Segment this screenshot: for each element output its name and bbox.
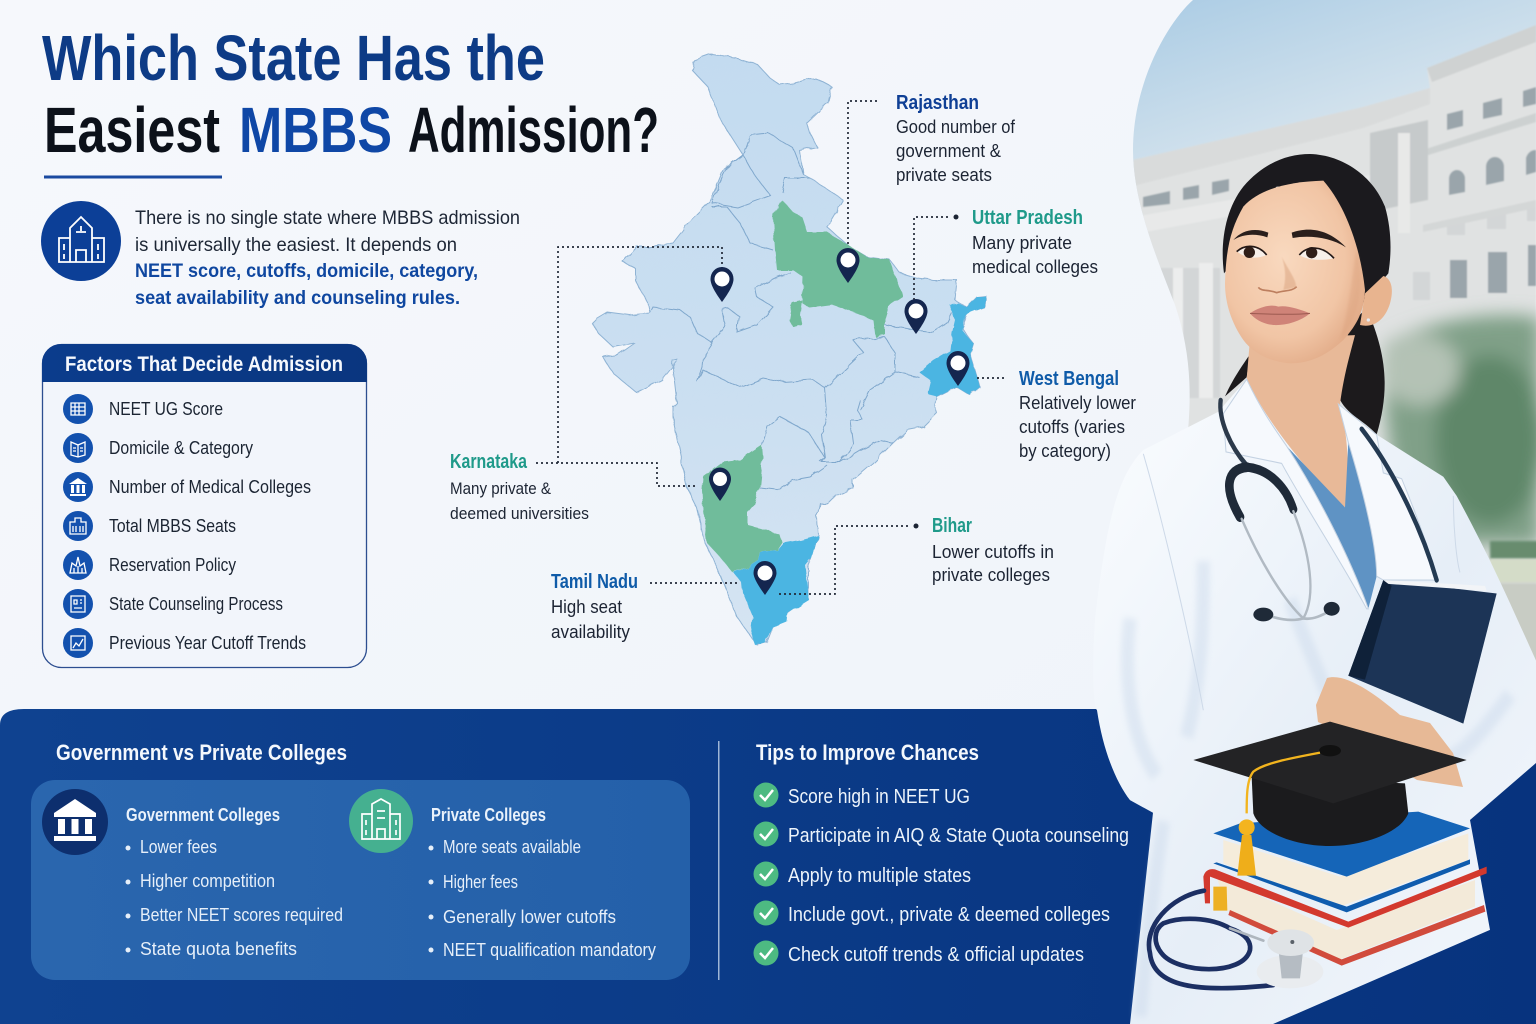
- list: government colleges: Higher competition: [140, 870, 275, 891]
- label: Rajasthan: government &: [896, 140, 1002, 161]
- label: Karnataka: Karnataka: [450, 451, 528, 473]
- factor: Reservation Policy: [63, 550, 236, 580]
- label: West Bengal: Relatively lower: [1019, 392, 1136, 413]
- label: Rajasthan: Rajasthan: [896, 92, 979, 114]
- label: Tamil Nadu: High seat: [551, 596, 622, 617]
- factor: State Counseling Process: [63, 589, 283, 619]
- label: Bihar: Lower cutoffs in: [932, 541, 1054, 562]
- panel: factors that decide admission: Factors That Decide Admission: [65, 353, 343, 376]
- map pins: [709, 248, 970, 595]
- ear: [1360, 276, 1392, 326]
- coat: [1093, 379, 1536, 1024]
- list: private colleges: Generally lower cutoffs: [443, 906, 616, 927]
- scrubs: [1287, 442, 1377, 609]
- pin: West Bengal: [946, 351, 970, 386]
- pin: Bihar: [904, 299, 928, 334]
- blue book: [1213, 812, 1470, 912]
- tip 3: Apply to multiple states: [788, 865, 971, 887]
- title: MBBS: [239, 94, 392, 166]
- label: Tamil Nadu: Tamil Nadu: [551, 571, 638, 593]
- nose: [1258, 287, 1297, 293]
- red book: [1203, 867, 1487, 966]
- panel: college comparison: [31, 780, 690, 980]
- list: private colleges: NEET qualification mandatory: [443, 939, 657, 960]
- factor: Total MBBS Seats: Total MBBS Seats: [109, 516, 236, 536]
- bottom panel background: [0, 709, 1536, 1024]
- stethoscope on books: [1149, 891, 1290, 988]
- label: West Bengal: by category): [1019, 440, 1111, 461]
- highlighted state: Tamil Nadu: [733, 535, 818, 645]
- pin: Karnataka: [709, 468, 731, 501]
- highlighted state: Karnataka: [702, 445, 782, 572]
- factor: Previous Year Cutoff Trends: [63, 628, 306, 658]
- cap: [1193, 722, 1467, 911]
- list: government colleges: Better NEET scores required: [140, 904, 343, 925]
- factor: Reservation Policy: Reservation Policy: [109, 555, 236, 575]
- title: Admission?: [408, 94, 659, 166]
- title: Which State Has the: [42, 22, 545, 94]
- stethoscope: [1220, 400, 1437, 620]
- factor: Total MBBS Seats: [63, 511, 236, 541]
- icon: college building: [41, 201, 121, 281]
- title: [42, 22, 659, 166]
- background photo: college building and trees: [1133, 0, 1536, 660]
- label: Tamil Nadu: [551, 571, 638, 642]
- tip 1: [754, 782, 970, 808]
- hand holding the notebook: [1316, 677, 1463, 787]
- panel: factors that decide admission: [42, 344, 367, 668]
- factor: State Counseling Process: State Counseling Process: [109, 594, 283, 614]
- tip 5: Check cutoff trends & official updates: [788, 944, 1084, 966]
- head: [1223, 154, 1392, 363]
- tip 3: [754, 862, 971, 887]
- title: Easiest: [44, 94, 220, 166]
- list: private colleges: Private Colleges: [431, 804, 546, 825]
- label: Uttar Pradesh: [972, 207, 1098, 277]
- pin: central west: [710, 267, 734, 302]
- label: Uttar Pradesh: medical colleges: [972, 256, 1098, 277]
- factor: NEET UG Score: NEET UG Score: [109, 399, 223, 419]
- eyebrows: [1233, 230, 1346, 247]
- heading: government vs private colleges: Government vs Private Colleges: [56, 740, 347, 765]
- right coat lapel: [1338, 404, 1438, 580]
- doctor illustration: [1093, 154, 1536, 1024]
- icon: private college: [349, 789, 413, 853]
- list: government colleges: Government Colleges: [126, 804, 280, 825]
- tip 4: Include govt., private & deemed colleges: [788, 904, 1110, 926]
- list: private colleges: [428, 804, 657, 960]
- factor: Number of Medical Colleges: [63, 472, 311, 502]
- intro text: NEET score, cutoffs, domicile, category,: [135, 260, 478, 282]
- intro text: is universally the easiest. It depends on: [135, 234, 457, 256]
- label: Rajasthan: private seats: [896, 164, 992, 185]
- label: West Bengal: cutoffs (varies: [1019, 416, 1125, 437]
- highlighted state: Uttar Pradesh: [773, 200, 903, 337]
- list: private colleges: More seats available: [443, 836, 581, 857]
- label: West Bengal: [1019, 368, 1136, 461]
- tip 2: Participate in AIQ & State Quota counseling: [788, 825, 1129, 847]
- intro text: seat availability and counseling rules.: [135, 287, 460, 309]
- pin: Tamil Nadu: [754, 561, 776, 595]
- factor: NEET UG Score: [63, 394, 223, 424]
- map of India: [592, 54, 986, 645]
- label: Tamil Nadu: availability: [551, 621, 631, 642]
- panel: tips to improve chances: [754, 740, 1129, 966]
- factor: Previous Year Cutoff Trends: Previous Year Cutoff Trends: [109, 633, 306, 653]
- factor: Domicile and Category: Domicile & Category: [109, 438, 253, 458]
- list: government colleges: State quota benefits: [140, 938, 297, 959]
- label: West Bengal: West Bengal: [1019, 368, 1119, 390]
- highlighted state: West Bengal: [919, 296, 986, 397]
- intro text: There is no single state where MBBS admission: [135, 207, 520, 229]
- eyes: [1237, 247, 1334, 260]
- connector lines: [536, 101, 1007, 594]
- list: government colleges: Lower fees: [140, 836, 217, 857]
- label: Rajasthan: Good number of: [896, 116, 1016, 137]
- notebook: [1348, 580, 1497, 724]
- label: Karnataka: Many private &: [450, 479, 552, 498]
- label: Uttar Pradesh: Many private: [972, 232, 1072, 253]
- label: Uttar Pradesh: Uttar Pradesh: [972, 207, 1083, 229]
- hair: [1223, 154, 1391, 307]
- face shading: [1340, 250, 1361, 340]
- panel: tips to improve chances: Tips to Improve Chances: [756, 740, 979, 765]
- icon: government college: [42, 789, 108, 855]
- factor: Domicile and Category: [63, 433, 253, 463]
- label: Bihar: [932, 515, 1054, 585]
- tip 1: Score high in NEET UG: [788, 786, 970, 808]
- coat shading: [1128, 561, 1510, 1016]
- ponytail: [1225, 308, 1385, 435]
- list: government colleges: [126, 804, 343, 959]
- list: private colleges: Higher fees: [443, 871, 518, 892]
- left coat lapel: [1223, 379, 1368, 609]
- label: Bihar: private colleges: [932, 564, 1050, 585]
- pin: Uttar Pradesh: [836, 248, 860, 283]
- label: Rajasthan: [896, 92, 1016, 185]
- factor: Number of Medical Colleges: Number of Medical Colleges: [109, 477, 311, 497]
- face: [1225, 181, 1365, 363]
- label: Bihar: Bihar: [932, 515, 972, 537]
- lips: [1250, 306, 1310, 325]
- label: Karnataka: [450, 451, 589, 523]
- label: Karnataka: deemed universities: [450, 504, 589, 523]
- neck: [1247, 335, 1355, 507]
- intro text: [135, 207, 520, 309]
- graduation cap and books: [1149, 722, 1487, 988]
- body and coat: [1093, 308, 1536, 1024]
